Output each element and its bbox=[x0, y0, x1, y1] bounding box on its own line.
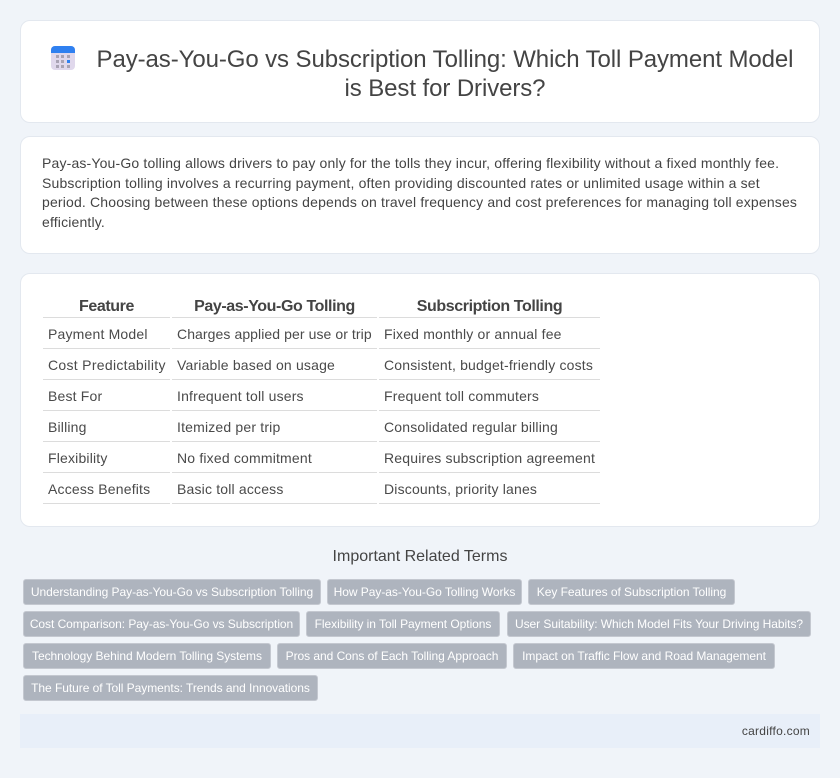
row: access benefits: Access Benefits bbox=[48, 481, 150, 497]
intro text: efficiently. bbox=[42, 214, 105, 230]
row: flexibility bbox=[48, 450, 595, 466]
tag: The Future of Toll Payments: Trends and Innovations bbox=[31, 681, 310, 695]
intro text: period. Choosing between these options depends on travel frequency and cost preferences for managing toll expenses bbox=[42, 194, 797, 210]
tag: Key Features of Subscription Tolling bbox=[537, 585, 726, 599]
tag: Flexibility in Toll Payment Options bbox=[315, 617, 491, 631]
tag: Cost Comparison: Pay-as-You-Go vs Subscription bbox=[30, 617, 293, 631]
tag bbox=[513, 643, 775, 669]
row: payment model: Payment Model bbox=[48, 326, 148, 342]
tag bbox=[327, 579, 522, 605]
row: billing: Consolidated regular billing bbox=[384, 419, 558, 435]
table header: Feature bbox=[79, 298, 134, 315]
row: cost predictability: Cost Predictability bbox=[48, 357, 166, 373]
row: payment model: Fixed monthly or annual fee bbox=[384, 326, 562, 342]
table header bbox=[79, 298, 562, 315]
icon: calendar bbox=[51, 46, 75, 70]
row: best for bbox=[48, 388, 539, 404]
tag: Impact on Traffic Flow and Road Management bbox=[522, 649, 766, 663]
tag bbox=[507, 611, 811, 637]
row: cost predictability: Consistent, budget-friendly costs bbox=[384, 357, 593, 373]
table header: Subscription Tolling bbox=[417, 298, 562, 315]
row: billing bbox=[48, 419, 558, 435]
row: access benefits bbox=[48, 481, 537, 497]
footer bbox=[20, 714, 820, 748]
tag bbox=[528, 579, 735, 605]
tag: Technology Behind Modern Tolling Systems bbox=[32, 649, 262, 663]
related term tags bbox=[23, 579, 811, 701]
row: flexibility: Flexibility bbox=[48, 450, 108, 466]
heading: important related terms: Important Related Terms bbox=[333, 548, 507, 565]
row: access benefits: Basic toll access bbox=[177, 481, 284, 497]
row: best for: Frequent toll commuters bbox=[384, 388, 539, 404]
tag bbox=[23, 675, 318, 701]
tag bbox=[23, 579, 321, 605]
title bbox=[97, 46, 793, 102]
tag: Understanding Pay-as-You-Go vs Subscription Tolling bbox=[31, 585, 313, 599]
row: flexibility: No fixed commitment bbox=[177, 450, 312, 466]
title: is Best for Drivers? bbox=[345, 75, 545, 102]
intro text: Subscription tolling involves a recurring payment, often providing discounted rates or unlimited usage within a set bbox=[42, 175, 760, 191]
tag: Pros and Cons of Each Tolling Approach bbox=[286, 649, 498, 663]
intro text: Pay-as-You-Go tolling allows drivers to pay only for the tolls they incur, offering flexibility without a fixed monthly fee. bbox=[42, 155, 779, 171]
row: cost predictability: Variable based on usage bbox=[177, 357, 335, 373]
row: best for: Best For bbox=[48, 388, 102, 404]
row: payment model bbox=[48, 326, 562, 342]
tag: User Suitability: Which Model Fits Your Driving Habits? bbox=[515, 617, 803, 631]
row: best for: Infrequent toll users bbox=[177, 388, 304, 404]
tag bbox=[23, 643, 271, 669]
panel: comparison table bbox=[20, 273, 820, 527]
footer source: cardiffo.com bbox=[742, 724, 810, 738]
row: billing: Itemized per trip bbox=[177, 419, 280, 435]
tag: How Pay-as-You-Go Tolling Works bbox=[334, 585, 515, 599]
panel: introduction bbox=[20, 136, 820, 254]
row: billing: Billing bbox=[48, 419, 87, 435]
tag bbox=[23, 611, 300, 637]
title: Pay-as-You-Go vs Subscription Tolling: Which Toll Payment Model bbox=[97, 46, 793, 73]
row: access benefits: Discounts, priority lanes bbox=[384, 481, 537, 497]
row: cost predictability bbox=[48, 357, 593, 373]
panel: title card bbox=[20, 20, 820, 123]
intro text bbox=[42, 155, 797, 230]
tag bbox=[306, 611, 500, 637]
tag bbox=[277, 643, 507, 669]
table header: Pay-as-You-Go Tolling bbox=[194, 298, 355, 315]
row: flexibility: Requires subscription agreement bbox=[384, 450, 595, 466]
row: payment model: Charges applied per use or trip bbox=[177, 326, 372, 342]
